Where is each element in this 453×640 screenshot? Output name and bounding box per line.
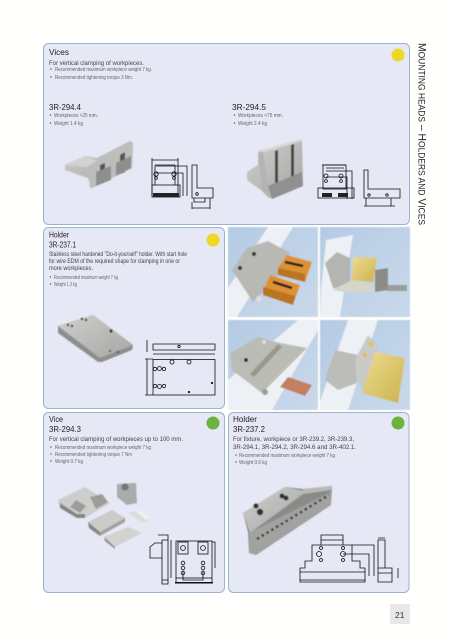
heading: vice 3R-294.3: 3R-294.3 [49,424,81,434]
list: vice specs: Weight 0.7 kg [55,459,83,465]
text: vices description: For vertical clamping of workpieces. [49,60,144,67]
heading: vice 3R-294.3 [49,414,81,434]
drawing: holder front and side views [300,535,398,582]
drawing: 3R-294.4 side view [192,165,213,209]
page number: 21 [395,610,405,620]
list: vices specs [50,67,152,81]
icon: yellow dot [392,48,404,62]
heading: holder 3R-237.1 [49,230,76,250]
list: 3R-294.5 specs [234,113,283,127]
icon: green dot [392,416,404,430]
list: 3R-294.4 specs: Weight 1.4 kg [54,121,83,127]
drawing: holder plate views [145,340,215,395]
drawing: 3R-294.5 side view [364,170,400,206]
text: holder description: Stainless steel hardened "Do-it-yourself" holder. With start hole [49,252,188,258]
text: holder description: more workpieces. [49,266,93,272]
heading: holder 3R-237.2 [233,414,265,434]
icon: yellow dot [206,234,220,246]
icon: green dot [206,416,220,430]
heading: holder 3R-237.1: Holder [49,230,69,240]
text: holder 3R-237.2 description: 3R-294.1, 3R-294.2, 3R-294.6 and 3R-402.1. [233,444,356,451]
list: holder specs [50,275,118,288]
text: holder description: for wire EDM of the required shape for clamping in one or [49,259,180,265]
photo: copper plate in holder [228,320,318,410]
photo: orange blocks on plate [228,227,318,317]
heading: holder 3R-237.1: 3R-237.1 [49,240,76,250]
text: vice description: For vertical clamping of workpieces up to 100 mm. [49,436,183,443]
list: holder 3R-237.2 specs: Recommended maximum workpiece weight 7 kg [239,453,335,459]
panel: holder 3R-237.2 [228,412,409,592]
list: vice specs [50,445,151,465]
drawing: vice side and front views [150,535,215,584]
list: holder specs: Weight 1.3 kg [54,282,77,288]
list: 3R-294.5 specs: Workpieces <75 mm. [238,113,283,119]
list: holder specs: Recommended maximum weight 7 kg [54,275,118,281]
heading: holder 3R-237.2: 3R-237.2 [233,424,265,434]
page number [390,604,410,624]
heading: 3R-294.4: 3R-294.4 [49,102,81,112]
heading: vice 3R-294.3: Vice [49,414,63,424]
list: 3R-294.4 specs: Workpieces <25 mm. [54,113,98,119]
photo: vice kit parts [58,483,150,549]
drawing: 3R-294.5 front view [318,165,354,199]
vertical title: M OUNTING HEADS – H OLDERS AND V ICES [416,43,428,225]
list: vice specs: Recommended tightening torque 7 Nm [55,452,132,458]
list: 3R-294.4 specs [50,113,98,127]
photo: gold block on holder [320,320,410,410]
panel: holder 3R-237.1 [44,228,224,408]
list: holder 3R-237.2 specs [235,453,335,466]
list: vices specs: Recommended tightening torque 3 Nm. [55,75,133,81]
photo: vice 3R-294.5 [247,139,303,199]
panel: vices [44,44,410,224]
photo: gold block in vice [320,227,410,317]
list: vice specs: Recommended maximum workpiece weight 7 kg [55,445,151,451]
panel: vice 3R-294.3 [44,412,224,592]
list: vices specs: Recommended maximum workpiece weight 7 kg. [55,67,152,73]
text: holder 3R-237.2 description [233,436,356,451]
text: holder description [49,252,188,272]
photo: vice 3R-294.4 [65,141,133,188]
photo: holder with hole row [243,486,332,555]
list: holder 3R-237.2 specs: Weight 0.6 kg [239,460,267,466]
drawing: 3R-294.4 front view [152,158,187,197]
heading: vices: Vices [49,47,69,57]
text: holder 3R-237.2 description: For fixture, workpiece or 3R-239.2, 3R-239.3, [233,436,354,443]
photo: holder plate [58,315,133,362]
list: 3R-294.5 specs: Weight 2.4 kg [238,121,267,127]
heading: 3R-294.5: 3R-294.5 [232,102,266,112]
heading: holder 3R-237.2: Holder [233,414,257,424]
